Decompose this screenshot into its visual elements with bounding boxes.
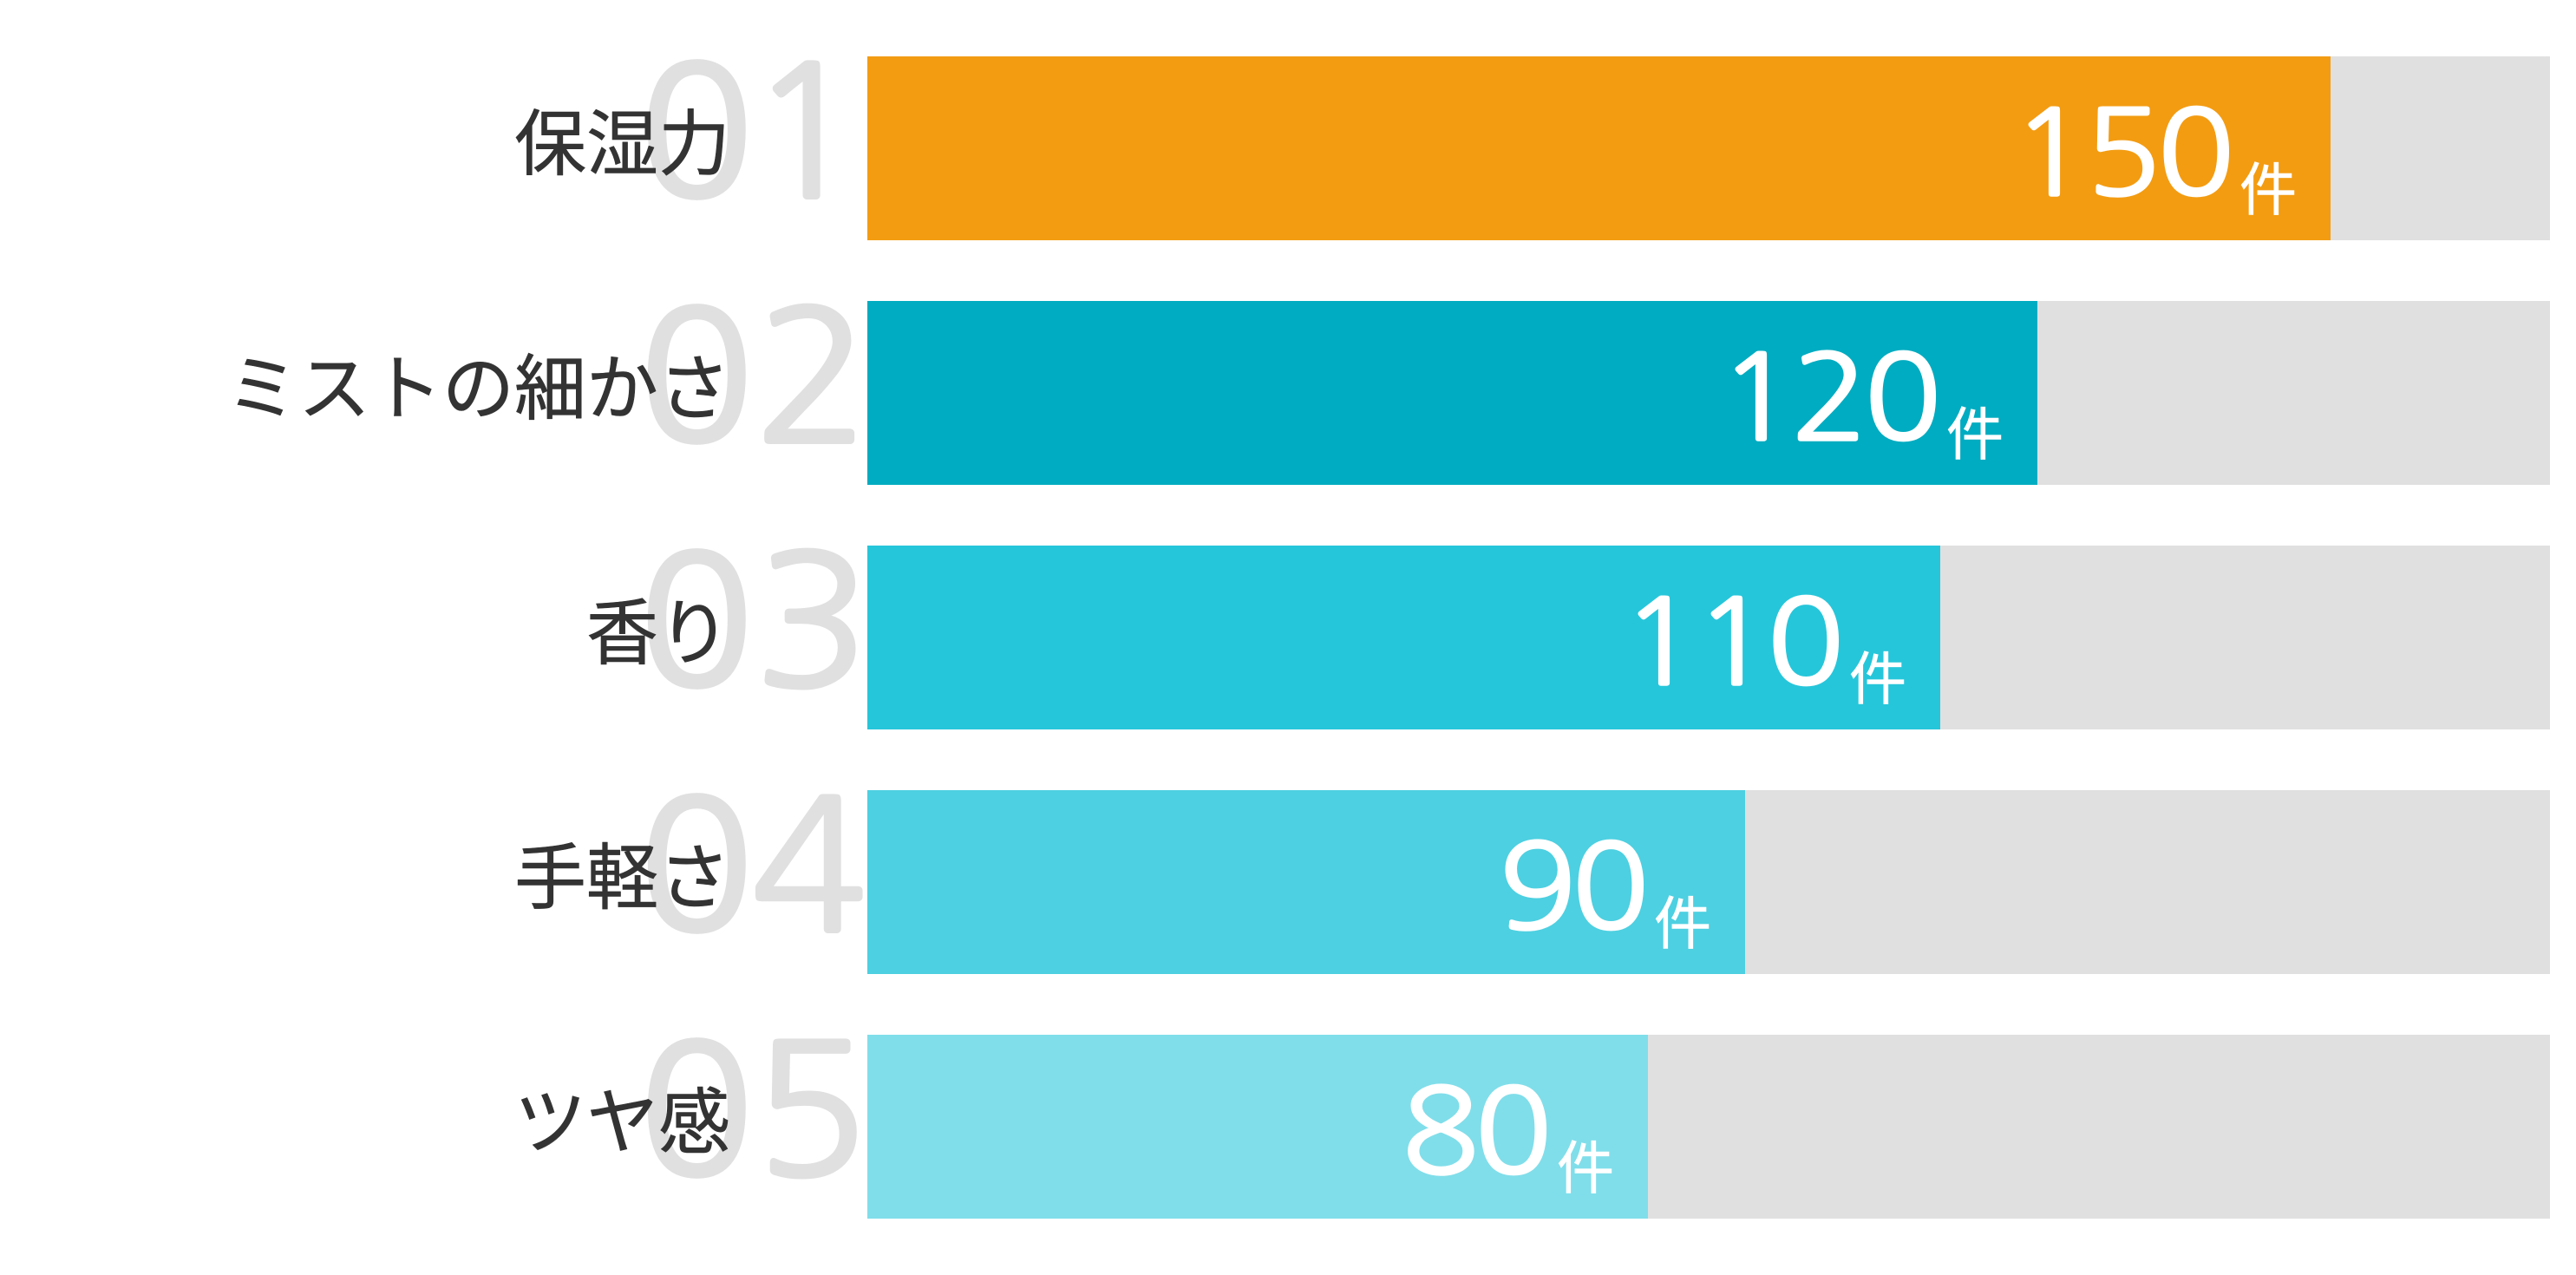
ranking row 5: ツヤ感 [514, 1020, 2550, 1219]
bar 1 [867, 56, 2331, 240]
rank number 01: 01 [638, 42, 863, 223]
rank number 03: 03 [638, 531, 870, 712]
bar 2 [867, 301, 2037, 485]
unit: 件 [1849, 647, 1906, 711]
value 120: 120 [1718, 339, 1942, 457]
rank number 04: 04 [638, 775, 866, 957]
value 90: 90 [1499, 828, 1650, 946]
track 1 [867, 56, 2550, 240]
label ミストの細かさ: ミストの細かさ [226, 349, 730, 429]
track 3 [867, 546, 2550, 729]
bar 3 [867, 546, 1940, 729]
value 150: 150 [2011, 95, 2235, 212]
rank number 02: 02 [638, 286, 870, 468]
track 5 [867, 1035, 2550, 1219]
value 80: 80 [1402, 1073, 1553, 1191]
value 110: 110 [1621, 584, 1845, 702]
unit: 件 [2239, 158, 2297, 222]
track 4 [867, 790, 2550, 974]
label 手軽さ: 手軽さ [514, 838, 730, 919]
bar 4 [867, 790, 1745, 974]
rank number 05: 05 [638, 1020, 868, 1201]
label 保湿力: 保湿力 [514, 104, 730, 185]
track 2 [867, 301, 2550, 485]
label 香り: 香り [586, 593, 730, 674]
unit: 件 [1654, 892, 1711, 956]
ranking row 1: 保湿力 [514, 42, 2550, 240]
unit: 件 [1946, 402, 2004, 467]
unit: 件 [1557, 1136, 1614, 1200]
ranking row 2: ミストの細かさ [226, 286, 2550, 485]
bar 5 [867, 1035, 1648, 1219]
ranking row 4: 手軽さ [514, 775, 2550, 974]
ranking row 3: 香り [586, 531, 2550, 729]
label ツヤ感: ツヤ感 [514, 1082, 730, 1163]
